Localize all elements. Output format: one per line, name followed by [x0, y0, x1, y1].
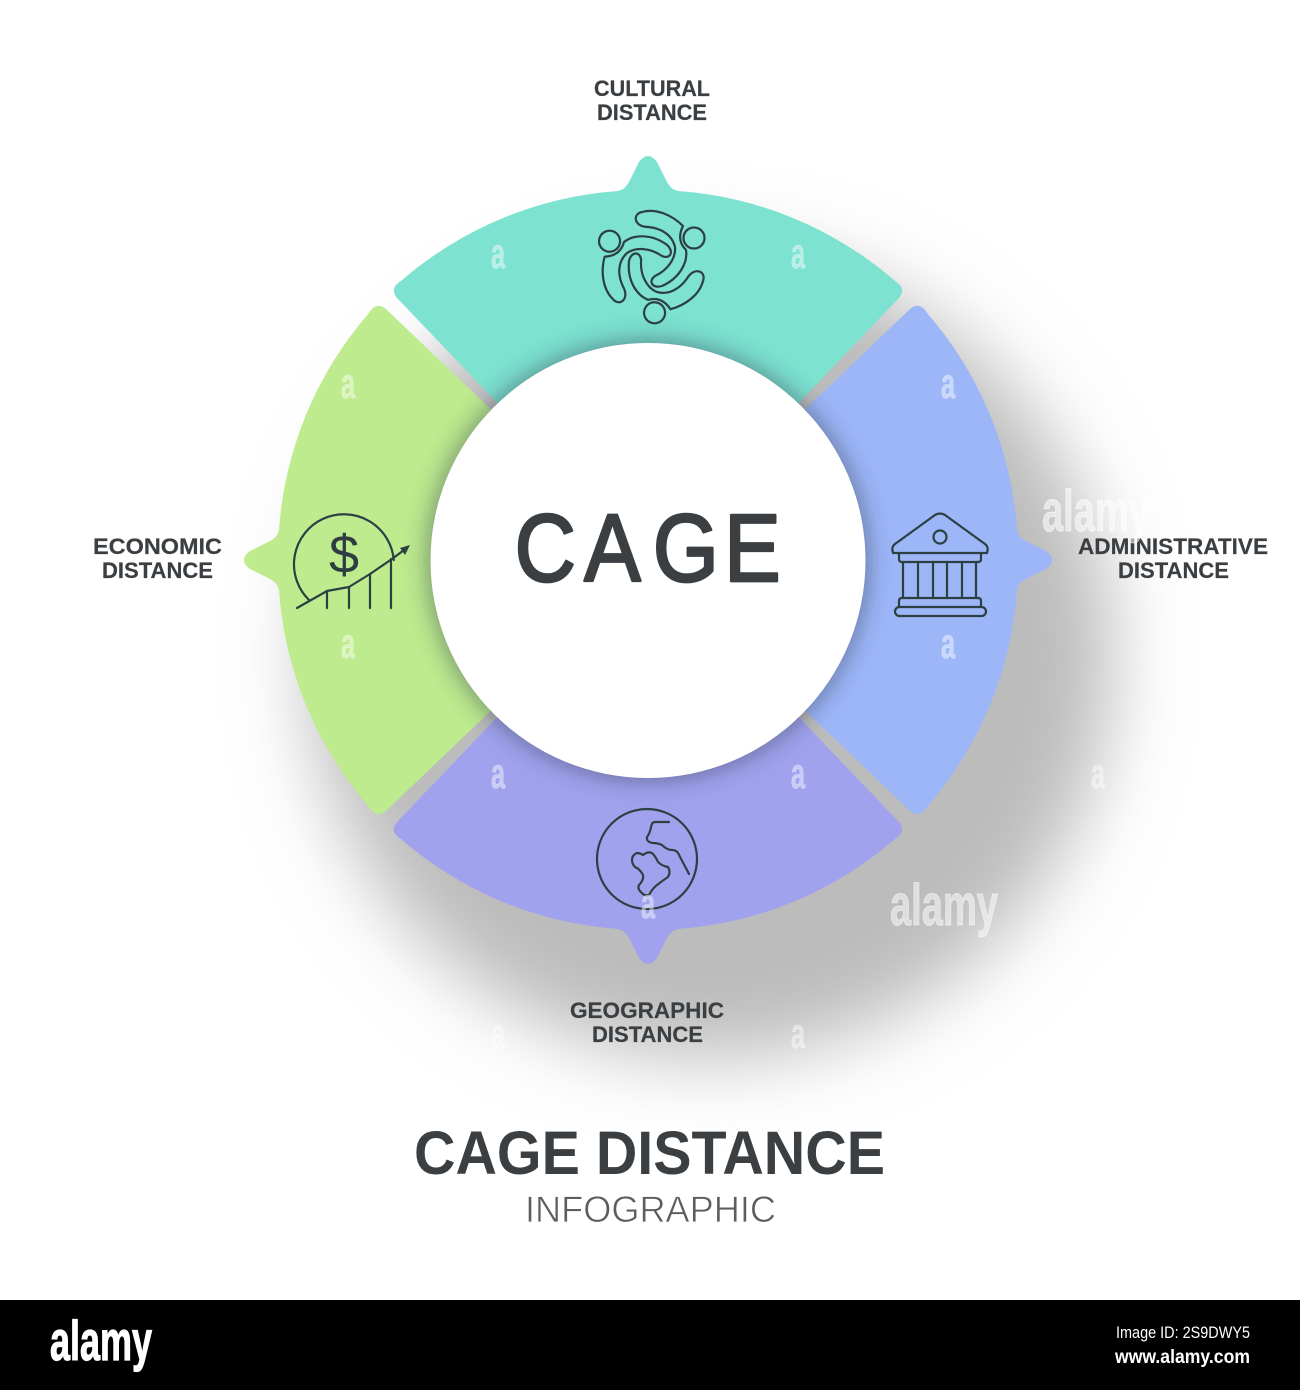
label: cultural distance: DISTANCE: [597, 100, 707, 125]
inner circle shadow: [426, 338, 870, 782]
label: administrative distance: DISTANCE: [1118, 558, 1229, 583]
title: CAGE DISTANCE: [414, 1119, 885, 1187]
watermark marks: a: [791, 1010, 806, 1058]
label: geographic distance: DISTANCE: [592, 1022, 703, 1047]
label: economic distance: [93, 534, 222, 583]
label: cultural distance: [594, 76, 710, 125]
watermark marks: a: [791, 750, 806, 798]
panel: administrative distance segment: [773, 306, 1052, 814]
heading: CAGE centre label: CAGE: [515, 495, 781, 602]
label: administrative distance: [1078, 534, 1268, 583]
panel: cultural distance segment: [394, 156, 902, 435]
watermark marks: a: [341, 620, 356, 668]
footer bar: [0, 1300, 1300, 1390]
label: economic distance: DISTANCE: [102, 558, 213, 583]
panel: economic distance segment: [244, 306, 523, 814]
icon: economic dollar growth chart: $: [329, 525, 359, 585]
label: economic distance: ECONOMIC: [93, 534, 222, 559]
centre circle: [430, 343, 866, 778]
watermark marks: a: [491, 1010, 506, 1058]
watermark marks: a: [941, 620, 956, 668]
watermark marks: a: [791, 230, 806, 278]
watermark marks: a: [641, 880, 656, 928]
watermark marks: a: [341, 360, 356, 408]
footer image id: Image ID: 2S9DWY5: [1116, 1323, 1250, 1342]
watermark: alamy lower right: alamy: [890, 873, 998, 938]
label: geographic distance: GEOGRAPHIC: [570, 998, 724, 1023]
diagram: CAGE ring: [244, 156, 1052, 964]
watermark marks: a: [1091, 750, 1106, 798]
icon: administrative government building: [892, 514, 988, 616]
footer logo: alamy: [50, 1309, 152, 1372]
watermark: alamy right: alamy: [1042, 479, 1150, 544]
ring drop shadow: [308, 254, 1112, 1058]
label: administrative distance: ADMINISTRATIVE: [1078, 534, 1268, 559]
label: cultural distance: CULTURAL: [594, 76, 710, 101]
watermark marks: a: [941, 360, 956, 408]
subtitle: INFOGRAPHIC: [525, 1189, 776, 1230]
panel: geographic distance segment: [394, 685, 902, 964]
watermark marks: [341, 230, 1106, 1058]
watermark marks: a: [491, 750, 506, 798]
watermark marks: a: [491, 230, 506, 278]
icon: geographic globe: [597, 809, 697, 909]
label: geographic distance: [570, 998, 724, 1047]
icon: cultural people circle: [581, 208, 707, 335]
footer url: www.alamy.com: [1114, 1347, 1250, 1368]
icon: economic dollar growth chart: [294, 514, 410, 608]
